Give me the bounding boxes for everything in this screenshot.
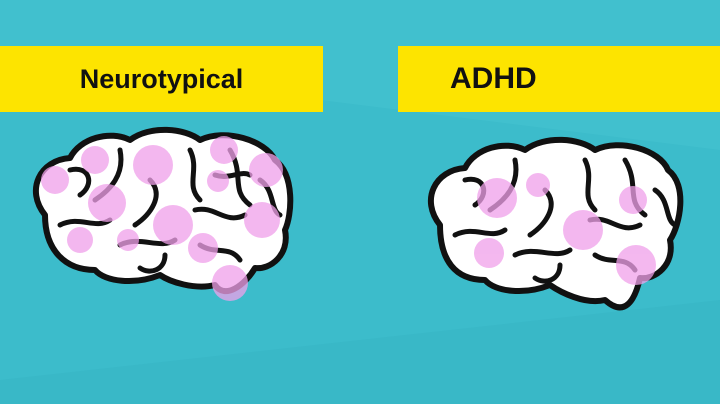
- banner: ADHD: [398, 46, 720, 112]
- banner: ADHD: ADHD: [450, 62, 537, 95]
- banner: Neurotypical: Neurotypical: [80, 64, 243, 94]
- banner: Neurotypical: [0, 46, 323, 112]
